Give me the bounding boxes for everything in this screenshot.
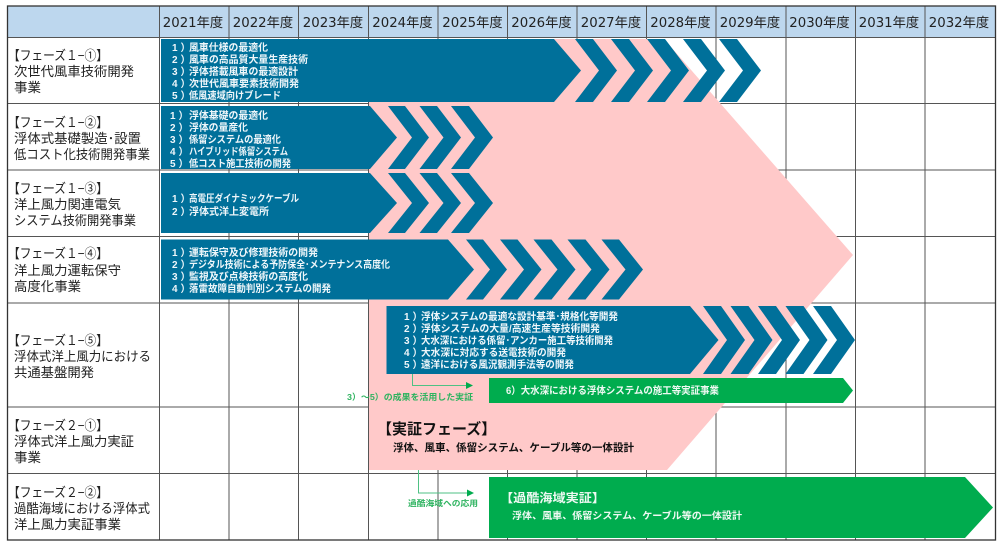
row 3 bar: electrical systems: 高電圧ダイナミックケーブル [189,192,299,205]
green arrow bar: harsh sea demonstration [489,477,993,538]
year header row: 2031年度 [859,15,919,31]
year header row: 2023年度 [303,15,363,31]
row 4 bar: operation and maintenance [161,240,643,300]
row labels: 次世代風車技術開発 [14,64,134,79]
row labels: 浮体式洋上風力実証 [14,434,134,449]
row labels: 【フェーズ２−②】 [8,485,108,500]
row 5 bar: common floating platform: 大水深における係留･アンカー施工等技術開発 [421,334,613,347]
pink demonstration phase arrow [369,39,853,470]
row 5 bar: common floating platform [386,306,855,374]
demonstration phase text: 浮体、風車、係留システム、ケーブル等の一体設計 [393,441,634,454]
row labels: 高度化事業 [14,278,81,294]
row 2 bar: floating foundation: ハイブリッド係留システム [189,145,288,158]
year header row: 2030年度 [789,15,850,31]
row labels: システム技術開発事業 [14,213,136,228]
row 5 bar: common floating platform: 大水深に対応する送電技術の開発 [421,346,566,359]
row 4 bar: operation and maintenance: 落雷故障自動判別システムの開発 [189,282,331,295]
row 1 bar: next-generation wind turbine: 2） [172,54,194,66]
row 1 bar: next-generation wind turbine: 4） [172,78,194,90]
row 2 bar: floating foundation: 低コスト施工技術の開発 [189,157,291,170]
row 3 bar: electrical systems: 2） [172,206,194,218]
row 2 bar: floating foundation: 3） [170,134,192,146]
row 2 bar: floating foundation: 1） [170,110,192,122]
table header background [7,6,996,37]
row 5 bar: common floating platform: 5） [404,359,426,371]
green arrow bar: deep water demonstration [489,378,853,403]
row 4 bar: operation and maintenance: 3） [172,271,194,283]
connector arrow: application to harsh seas [408,470,478,508]
row 5 bar: common floating platform: 遠洋における風況観測手法等の開発 [421,358,574,371]
row 4 bar: operation and maintenance: 2） [172,259,194,271]
year header row: 2027年度 [581,15,641,31]
row 4 bar: operation and maintenance: 監視及び点検技術の高度化 [189,270,308,283]
row 1 bar: next-generation wind turbine: 風車仕様の最適化 [189,41,268,54]
row 1 bar: next-generation wind turbine: 浮体搭載風車の最適設計 [189,65,298,78]
green arrow bar: harsh sea demonstration: 【過酷海域実証】 [500,490,605,505]
year header row: 2021年度 [163,15,223,31]
row labels: 【フェーズ１−④】 [8,246,108,261]
year header row: 2028年度 [650,15,711,31]
row labels: 浮体式洋上風力における [14,349,151,364]
connector arrow: application to harsh seas: 過酷海域への応用 [408,498,478,508]
year header row: 2029年度 [720,15,780,31]
row labels: 共通基盤開発 [14,365,94,380]
row 2 bar: floating foundation: 2） [170,122,192,134]
row labels: 洋上風力実証事業 [14,517,121,532]
demonstration phase text: 【実証フェーズ】 [377,420,496,438]
row 1 bar: next-generation wind turbine: 低風速域向けブレード [189,89,281,102]
row 2 bar: floating foundation: 浮体基礎の最適化 [189,109,268,122]
row 5 bar: common floating platform: 2） [404,323,426,335]
row 1 bar: next-generation wind turbine: 1） [172,42,194,54]
row 1 bar: next-generation wind turbine [161,39,761,102]
year header row [163,15,989,31]
row 5 bar: common floating platform: 1） [404,311,426,323]
row 1 bar: next-generation wind turbine: 5） [172,90,194,102]
row 2 bar: floating foundation: 係留システムの最適化 [189,133,281,146]
row labels: 【フェーズ２−①】 [8,418,108,433]
green arrow bar: deep water demonstration: 6）大水深における浮体システムの施工等実証事業 [506,384,719,397]
connector arrow: results applied to demonstration [347,374,473,402]
row 4 bar: operation and maintenance: 運転保守及び修理技術の開発 [189,246,318,259]
green arrow bar: harsh sea demonstration: 浮体、風車、係留システム、ケーブル等の一体設計 [512,509,742,522]
row 5 bar: common floating platform: 浮体システムの最適な設計基準･規格化等開発 [421,310,618,323]
row labels: 低コスト化技術開発事業 [14,147,150,162]
year header row: 2025年度 [442,15,503,31]
year header row: 2022年度 [233,15,293,31]
row 3 bar: electrical systems: 1） [172,193,194,205]
row 2 bar: floating foundation: 5） [170,158,192,170]
row 2 bar: floating foundation [161,106,493,170]
row 4 bar: operation and maintenance: 4） [172,283,194,295]
row labels: 過酷海域における浮体式 [14,501,150,516]
demonstration phase text [377,420,634,454]
row 1 bar: next-generation wind turbine: 3） [172,66,194,78]
row 1 bar: next-generation wind turbine: 風車の高品質大量生産技術 [189,53,308,66]
row labels: 浮体式基礎製造･設置 [14,131,141,146]
row labels: 【フェーズ１−③】 [8,181,108,196]
row 1 bar: next-generation wind turbine: 次世代風車要素技術開発 [189,77,299,90]
row 5 bar: common floating platform: 3） [404,335,426,347]
row 3 bar: electrical systems: 浮体式洋上変電所 [189,205,269,218]
row 4 bar: operation and maintenance: 1） [172,247,194,259]
row 3 bar: electrical systems [161,173,493,233]
row labels: 洋上風力関連電気 [14,197,121,212]
row 5 bar: common floating platform: 4） [404,347,426,359]
row labels: 事業 [14,450,41,465]
row labels: 事業 [14,80,41,95]
row 5 bar: common floating platform: 浮体システムの大量/高速生産等技術開発 [421,322,600,335]
year header row: 2024年度 [372,15,433,31]
connector arrow: results applied to demonstration: 3）～5）の成果を活用した実証 [347,391,473,402]
row 2 bar: floating foundation: 浮体の量産化 [189,121,248,134]
year header row: 2026年度 [511,15,572,31]
row labels: 【フェーズ１−⑤】 [8,333,108,348]
row labels: 【フェーズ１−②】 [8,115,108,130]
row 2 bar: floating foundation: 4） [170,146,192,158]
row labels: 洋上風力運転保守 [14,263,121,278]
row labels [8,48,151,532]
row labels: 【フェーズ１−①】 [8,48,108,63]
row 4 bar: operation and maintenance: デジタル技術による予防保全･メンテナンス高度化 [189,258,390,271]
year header row: 2032年度 [929,15,989,31]
